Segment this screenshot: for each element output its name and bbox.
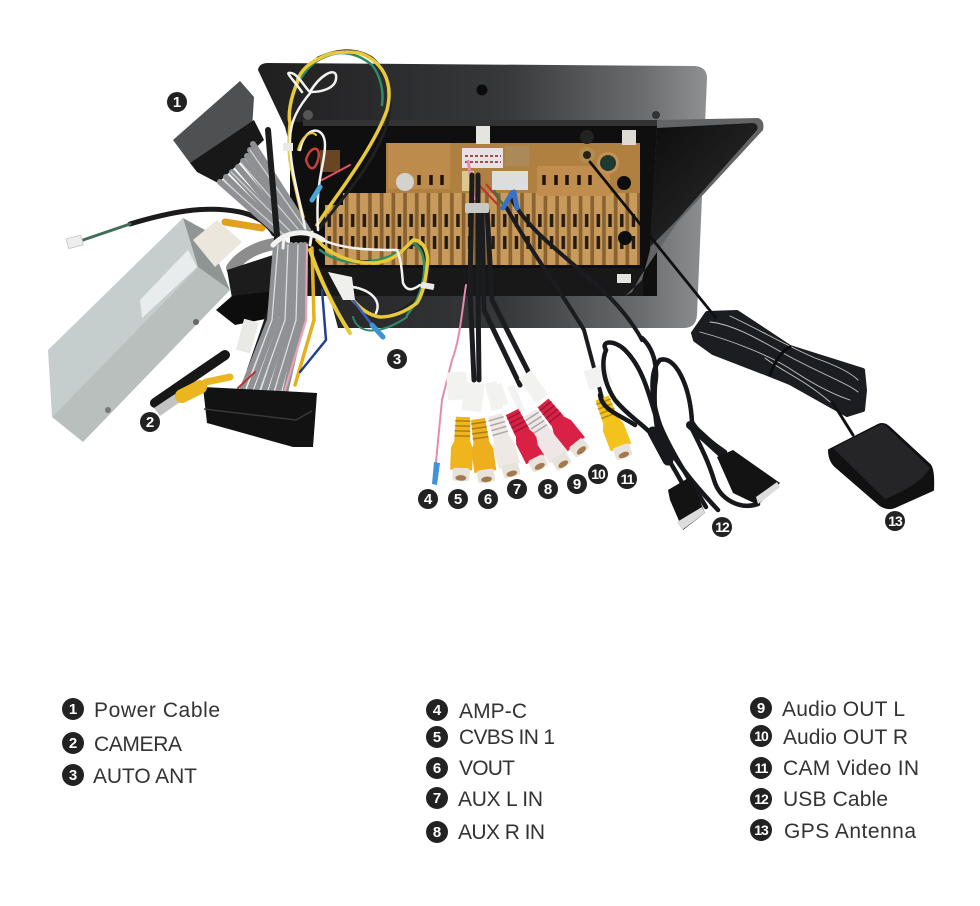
photo number badges: 5 (454, 491, 462, 508)
legend item 1: Power Cable (94, 699, 220, 722)
wiring harness (220, 130, 326, 393)
panel: hinged side flap (625, 118, 763, 296)
legend column 1 (62, 698, 220, 788)
legend item 2: CAMERA (94, 733, 182, 756)
legend item 5: 5 (433, 729, 441, 746)
photo number badges: 8 (544, 481, 552, 498)
photo number badges: 11 (621, 471, 635, 487)
photo number badges: 10 (591, 466, 606, 482)
legend item 5: CVBS IN 1 (459, 726, 555, 749)
photo number badges: 13 (888, 513, 903, 529)
power connector grey top (173, 81, 264, 183)
legend item 2: 2 (69, 735, 77, 752)
photo number badges: 2 (146, 414, 154, 431)
panel: flap inner face (650, 123, 758, 247)
RCA labels (446, 364, 613, 413)
photo number badges: 1 (173, 94, 181, 111)
photo number badges (140, 92, 905, 537)
bottom power connector (203, 387, 317, 447)
GPS antenna puck (829, 424, 933, 508)
black connector mid (216, 243, 285, 325)
legend item 8: 8 (433, 824, 441, 841)
USB cables (600, 338, 780, 530)
cable tie labels (273, 143, 434, 300)
camera RCA plug (154, 355, 230, 416)
legend item 4: 4 (433, 702, 442, 719)
legend item 13: 13 (754, 822, 769, 838)
photo number badges: 7 (513, 481, 521, 498)
panel: recessed circuit board (290, 120, 657, 296)
tip: blue antenna pin (372, 325, 383, 337)
legend item 4 (426, 699, 527, 723)
legend item 4: AMP-C (459, 700, 527, 723)
photo number badges: 4 (424, 491, 433, 508)
legend item 12: 12 (754, 791, 769, 807)
legend item 6: 6 (433, 760, 441, 777)
legend item 10: 10 (754, 728, 769, 744)
connectors on circuit board (462, 146, 529, 205)
AV cables (432, 175, 642, 485)
legend item 10: Audio OUT R (783, 726, 908, 749)
legend item 3: AUTO ANT (93, 765, 197, 788)
icon: gold antenna connector (579, 147, 595, 163)
legend item 3: 3 (69, 767, 77, 784)
GPS cable coil (590, 162, 865, 435)
photo number badges: 12 (715, 519, 730, 535)
legend item 6: VOUT (459, 757, 515, 780)
RCA plugs (450, 394, 635, 484)
legend item 1: 1 (69, 701, 77, 718)
panel: head unit back plate (258, 63, 707, 328)
photo number badges: 9 (573, 476, 581, 493)
legend item 6 (426, 757, 515, 780)
photo number badges: 6 (484, 491, 492, 508)
legend item 9: Audio OUT L (782, 698, 905, 721)
legend column 3 (750, 697, 919, 843)
white power plug (193, 220, 262, 267)
metal converter box (48, 218, 230, 442)
legend item 7 (426, 787, 543, 811)
legend item 13: GPS Antenna (784, 820, 916, 843)
legend item 11: 11 (755, 760, 769, 776)
legend item 8: AUX R IN (458, 821, 545, 844)
legend item 7: AUX L IN (458, 788, 543, 811)
legend item 11: CAM Video IN (783, 757, 919, 780)
legend item 7: 7 (433, 790, 441, 807)
photo number badges: 3 (393, 351, 401, 368)
legend item 9: 9 (757, 700, 765, 717)
legend column 2 (426, 699, 555, 844)
coloured signal wires (288, 51, 433, 333)
legend item 12: USB Cable (783, 788, 888, 811)
cable with small plug (66, 209, 274, 249)
